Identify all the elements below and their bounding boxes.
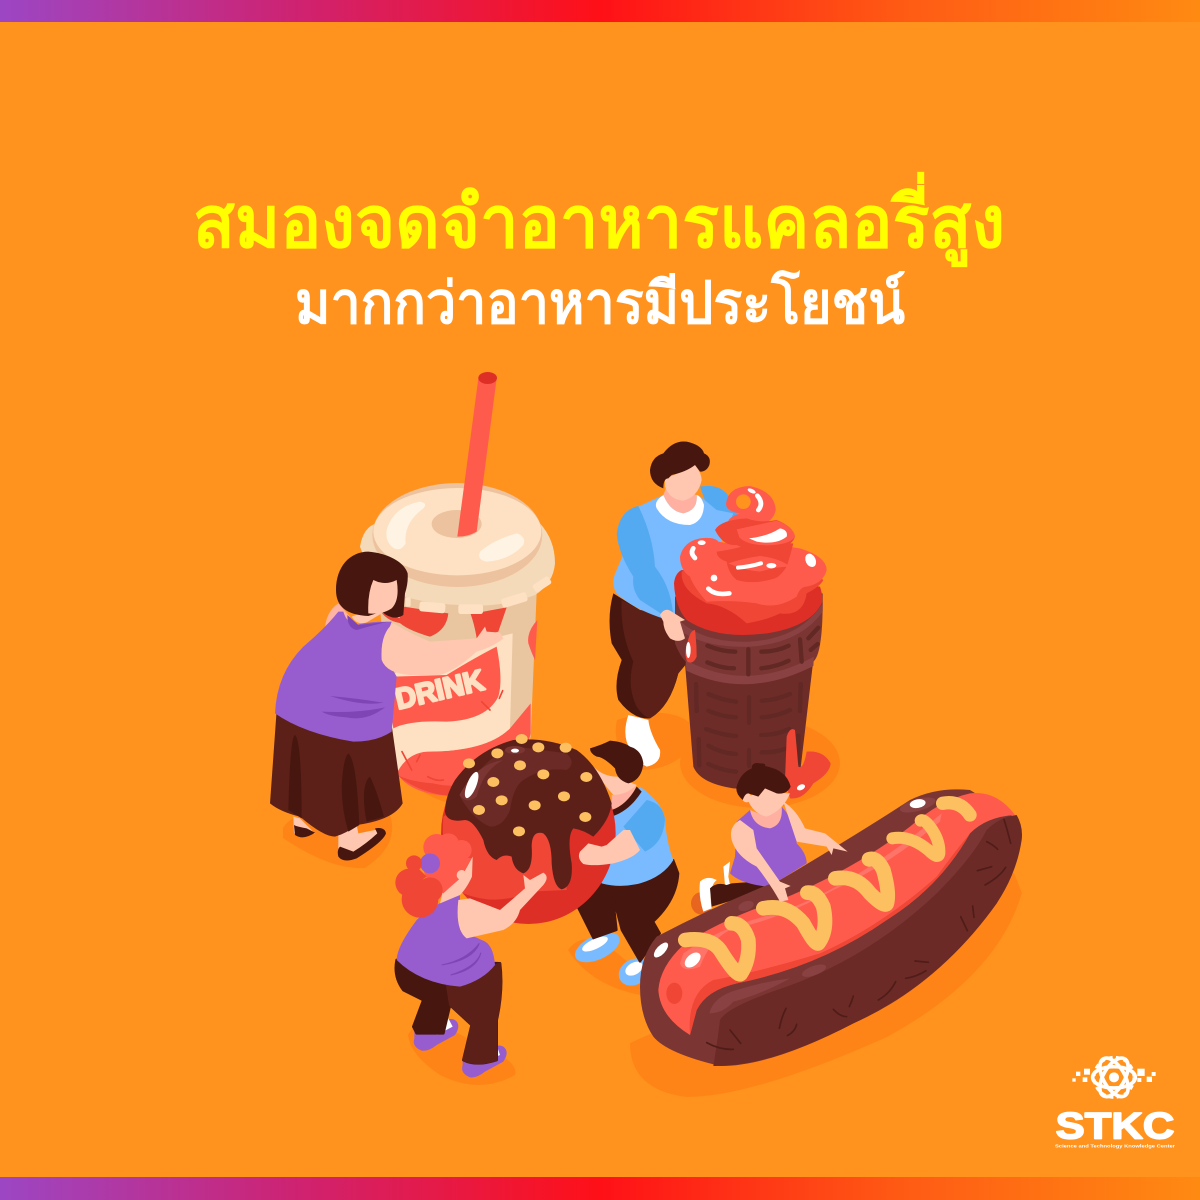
ice cream swirl [674, 486, 831, 798]
logo atom icon [1072, 1054, 1156, 1101]
man pushing ball [571, 741, 678, 991]
cup lid [360, 483, 555, 614]
child in purple [691, 763, 807, 915]
illustration: hot dog with child [640, 763, 1022, 1066]
man's arm on ball [579, 830, 640, 865]
child's arms on hot dog [731, 802, 848, 902]
illustration: chocolate ball with two people [395, 734, 678, 1077]
straw [457, 372, 497, 537]
label text DRINK: DRINK [392, 664, 487, 716]
red ball [441, 743, 616, 924]
title line 1: สมองจดจำอาหารแคลอรี่สูง [193, 171, 1005, 268]
hot dog [640, 789, 1022, 1066]
man's hand on cone [660, 610, 685, 641]
man in blue sweater [610, 441, 740, 767]
woman [270, 552, 503, 860]
cone [675, 593, 823, 789]
ground shadows [283, 713, 1022, 1097]
title line 2: มากกว่าอาหารมีประโยชน์ [295, 268, 906, 336]
bottom gradient bar [0, 1177, 1200, 1200]
logo wordmark: STKC [1056, 1105, 1174, 1147]
chocolate topping with sprinkles [445, 734, 612, 889]
logo tagline: Science and Technology Knowledge Center [1055, 1144, 1175, 1150]
title [193, 171, 1005, 336]
STKC logo [1055, 1054, 1175, 1150]
top gradient bar [0, 0, 1200, 22]
illustration: ice cream cone with man [610, 441, 831, 798]
cup body [377, 577, 537, 796]
illustration: drink cup with woman [270, 372, 555, 860]
girl with red hair [395, 833, 547, 1077]
